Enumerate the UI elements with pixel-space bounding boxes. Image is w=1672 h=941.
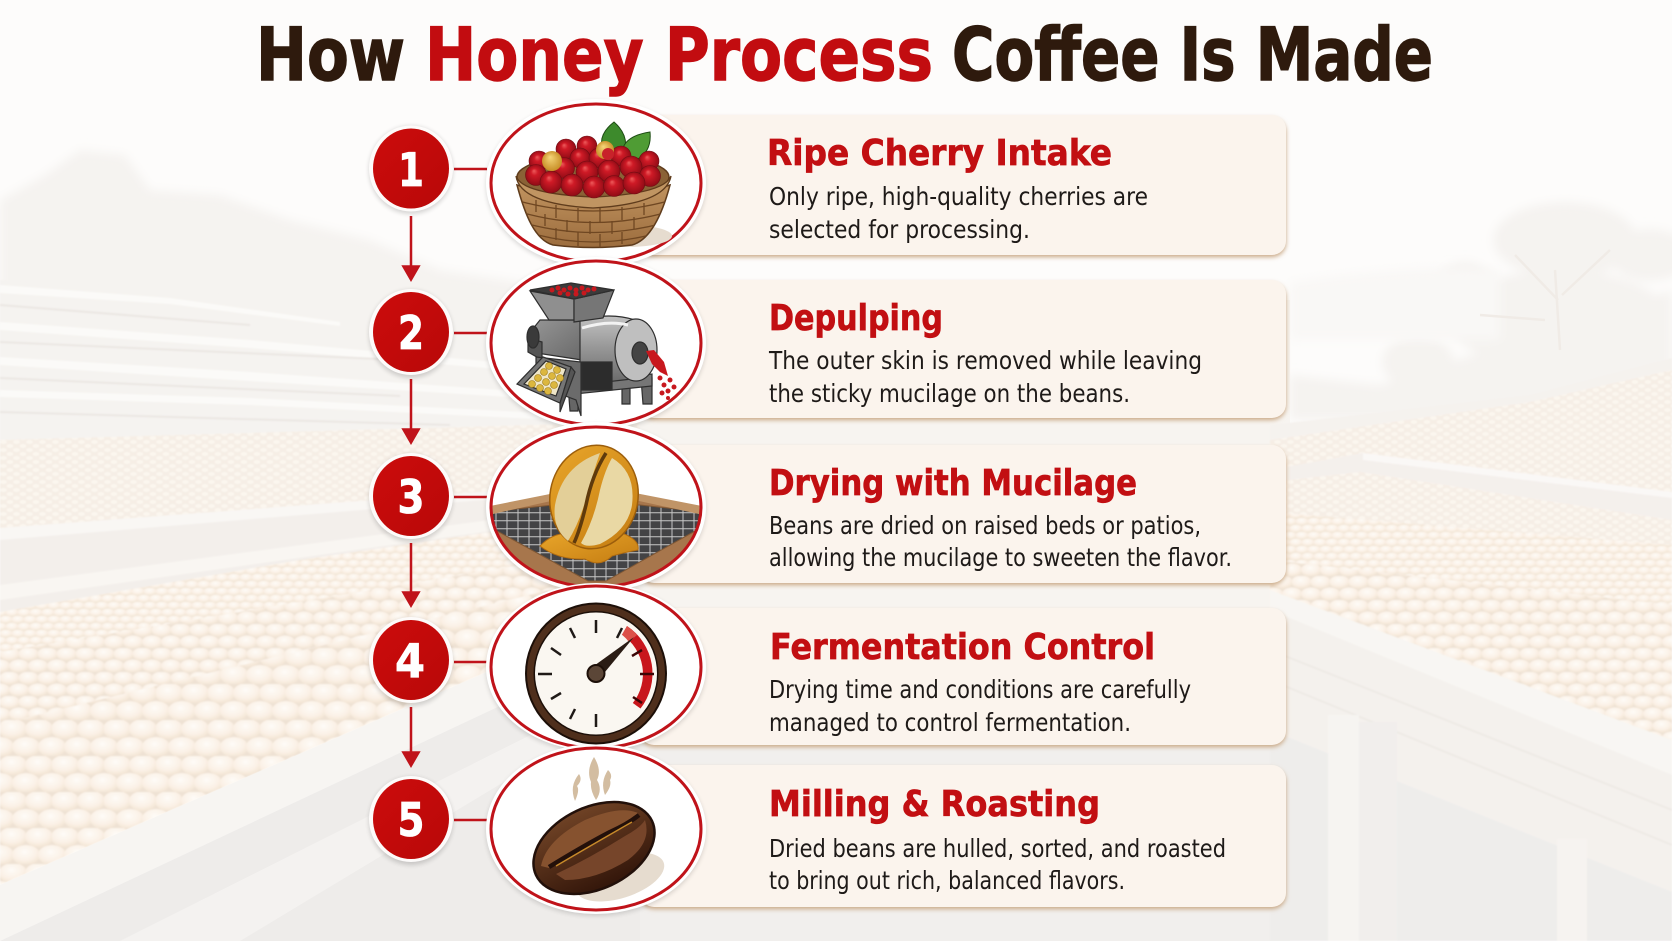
icon: red cherries in hopper and skins (550, 286, 676, 400)
image oval: depulping machine (486, 257, 706, 431)
card: fermentation control: Drying time and conditions are carefully (769, 675, 1191, 704)
title: How (256, 13, 405, 98)
connector (454, 819, 487, 821)
card: depulping: the sticky mucilage on the beans. (769, 379, 1130, 408)
card: fermentation control (640, 608, 1286, 747)
step 5 (369, 744, 1286, 916)
card: drying with mucilage: allowing the mucilage to sweeten the flavor. (769, 543, 1232, 572)
connector (454, 168, 487, 170)
number badge 1 (369, 126, 453, 214)
number badge 3 (369, 453, 453, 542)
connector (454, 496, 487, 498)
icon: machine (517, 283, 657, 416)
card: milling and roasting: Milling & Roasting (769, 784, 1100, 825)
title (256, 13, 1433, 98)
number badge 3: 3 (398, 470, 424, 524)
icon: drying mesh tray (492, 494, 700, 584)
card: milling and roasting: to bring out rich, balanced flavors. (769, 866, 1125, 895)
connector (454, 661, 487, 663)
image oval: basket of cherries (486, 99, 706, 269)
card: drying with mucilage: Drying with Mucilage (769, 463, 1137, 504)
number badge 5 (369, 776, 453, 865)
number badge 2: 2 (398, 306, 424, 360)
number badge 2 (369, 289, 453, 378)
number badge 1: 1 (398, 143, 424, 197)
card: drying with mucilage (640, 445, 1286, 585)
card: ripe cherry intake: selected for processing. (769, 215, 1030, 244)
card: depulping (640, 280, 1286, 420)
arrow 4 to 5 (404, 707, 418, 766)
drying racks in the far left distance (0, 280, 640, 440)
card: milling and roasting (640, 765, 1286, 909)
connector (454, 332, 487, 334)
number badge 4 (369, 617, 453, 706)
card: fermentation control: managed to control fermentation. (769, 708, 1131, 737)
icon: steam (573, 757, 611, 801)
number badge 5: 5 (398, 793, 424, 847)
card: ripe cherry intake: Only ripe, high-quality cherries are (769, 182, 1148, 211)
step 3 (369, 422, 1286, 606)
step 1 (369, 99, 1286, 280)
right raised beds (1270, 358, 1672, 941)
icon: gauge dial (525, 602, 667, 744)
card: depulping: The outer skin is removed while leaving (768, 346, 1202, 375)
card: fermentation control: Fermentation Control (770, 627, 1155, 668)
card: milling and roasting: Dried beans are hulled, sorted, and roasted (769, 834, 1226, 863)
step 2 (369, 257, 1286, 442)
image oval: bean on drying mesh (484, 422, 708, 589)
title: Honey Process (425, 13, 933, 98)
icon: yellow beans on tray (528, 362, 564, 394)
step 4 (369, 583, 1286, 753)
icon: roasted coffee bean (519, 784, 670, 912)
card: ripe cherry intake: Ripe Cherry Intake (767, 133, 1112, 174)
card: drying with mucilage: Beans are dried on raised beds or patios, (769, 511, 1201, 540)
arrow 2 to 3 (404, 379, 418, 442)
number badge 4: 4 (395, 634, 425, 688)
icon: honey-coated bean (540, 438, 646, 563)
image oval: gauge backing (486, 583, 706, 753)
title: Coffee Is Made (952, 13, 1433, 98)
image oval: roasted bean (486, 744, 706, 916)
icon: basket (515, 122, 672, 248)
arrow 3 to 4 (404, 543, 418, 606)
card: depulping: Depulping (769, 298, 943, 339)
arrow 1 to 2 (404, 216, 418, 280)
card: ripe cherry intake (640, 115, 1286, 257)
